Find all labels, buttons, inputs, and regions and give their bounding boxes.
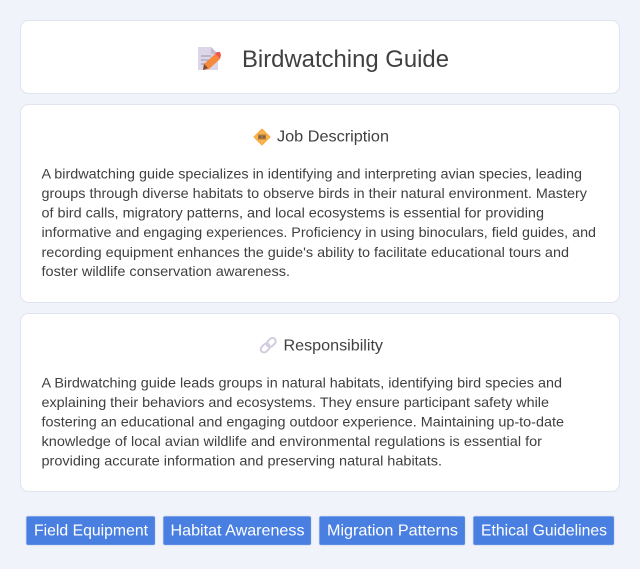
- icon: diamond sign: [254, 129, 270, 145]
- responsibility text: knowledge of local avian wildlife and environmental regulations is essential for: [42, 433, 542, 449]
- job description text: groups through diverse habitats to observe birds in their natural environment. Mastery: [42, 185, 587, 201]
- tag: migration patterns: [319, 516, 465, 545]
- panel: job description: [20, 104, 620, 302]
- title text: Birdwatching Guide: [242, 46, 449, 73]
- heading: job description: Job Description: [277, 128, 389, 146]
- tag: habitat awareness: Habitat Awareness: [170, 522, 304, 540]
- panel: title: [20, 20, 620, 94]
- tag: ethical guidelines: [473, 516, 614, 545]
- job description text: foster wildlife conservation awareness.: [42, 263, 290, 279]
- tag: habitat awareness: [163, 516, 311, 545]
- icon: link: [259, 337, 277, 354]
- tag: ethical guidelines: Ethical Guidelines: [481, 522, 607, 540]
- job description text: [42, 166, 596, 279]
- job description text: A birdwatching guide specializes in identifying and interpreting avian species, leading: [42, 166, 582, 182]
- responsibility text: providing accurate information and preserving natural habitats.: [42, 452, 442, 468]
- responsibility text: fostering an educational and engaging outdoor experience. Maintaining up-to-date: [42, 414, 564, 430]
- job description text: of bird calls, migratory patterns, and local ecosystems is essential for providing: [42, 204, 544, 220]
- tag: field equipment: [26, 516, 155, 545]
- tag: field equipment: Field Equipment: [34, 522, 149, 540]
- responsibility text: explaining their behaviors and ecosystems. They ensure participant safety while: [42, 394, 549, 410]
- icon: document with pencil: [198, 47, 221, 70]
- job description text: recording equipment enhances the guide's ability to facilitate educational tours and: [42, 244, 569, 260]
- heading: responsibility: Responsibility: [284, 338, 383, 354]
- responsibility text: [42, 374, 564, 468]
- tag: migration patterns: Migration Patterns: [327, 522, 458, 540]
- job description text: informative and engaging experiences. Proficiency in using binoculars, field guides, and: [42, 224, 596, 240]
- panel: responsibility: [20, 314, 620, 492]
- responsibility text: A Birdwatching guide leads groups in natural habitats, identifying bird species and: [42, 374, 562, 390]
